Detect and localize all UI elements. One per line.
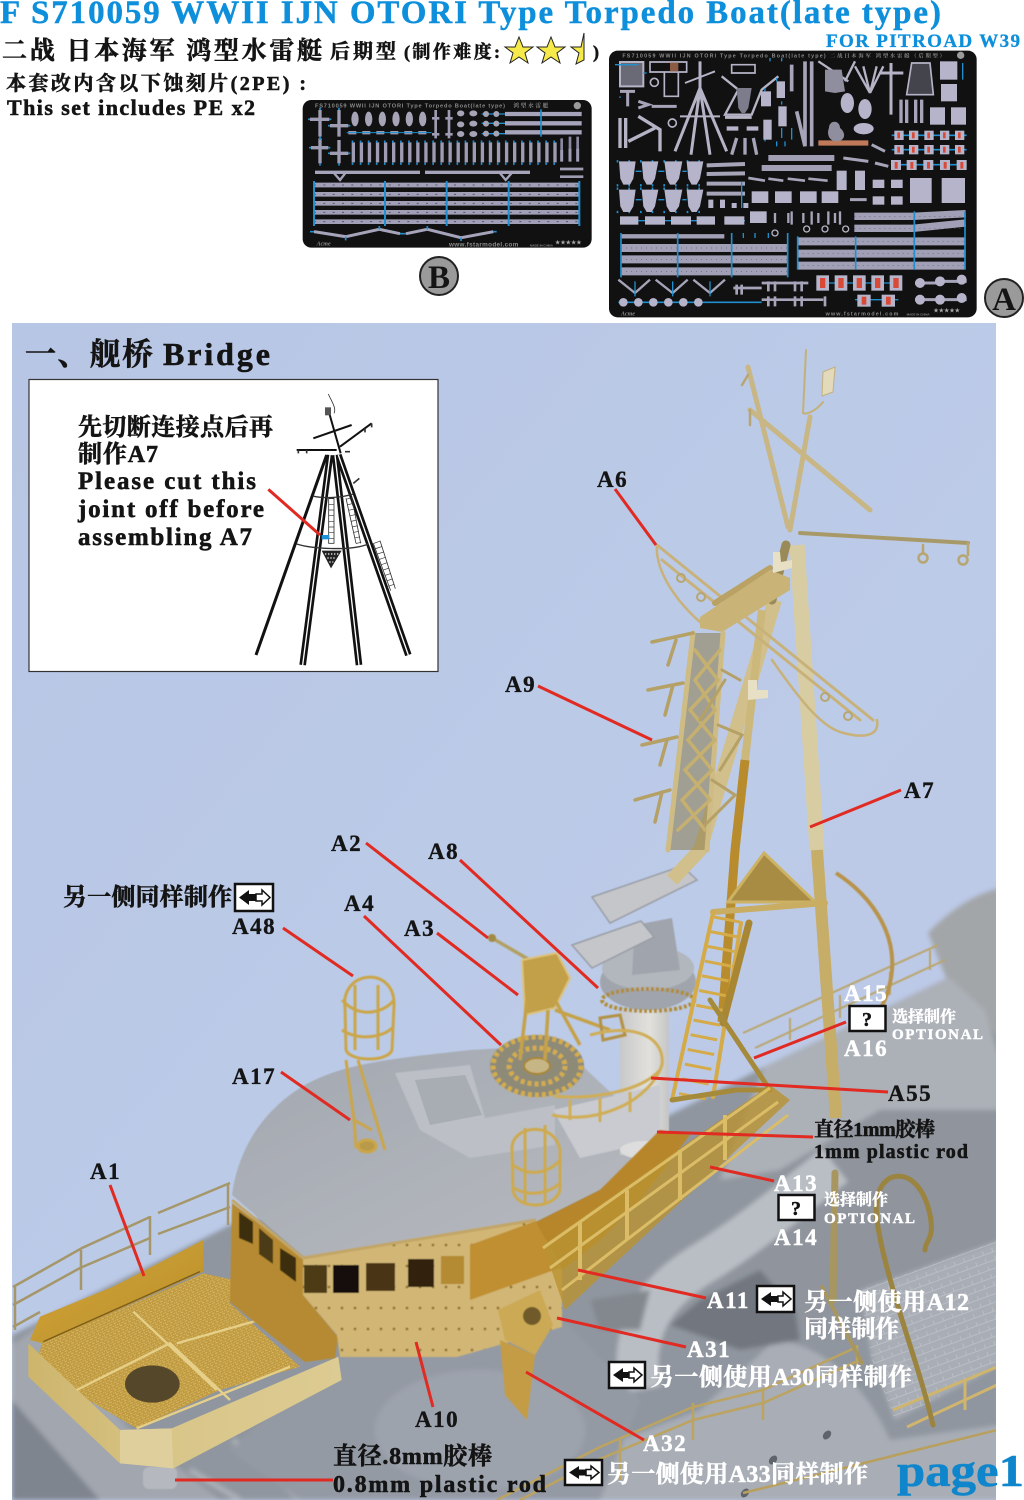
photo-etch sheet A: Acme	[620, 311, 635, 317]
dark part labels: A9	[505, 672, 536, 697]
optional callout A15/A16: A15	[844, 981, 888, 1006]
dark part labels: A6	[597, 467, 628, 492]
optional callout A15/A16: A16	[844, 1036, 888, 1061]
badge: sheet B	[420, 257, 458, 296]
forward platform A1	[28, 1240, 342, 1468]
label: A32 other side A33	[565, 1431, 868, 1488]
optional callout A13/A14: ?	[791, 1198, 801, 1220]
photo-etch sheet B: 鸿型水雷艇	[513, 102, 549, 110]
photo-etch sheet A: 二战日本海军 鸿型水雷艇（后期型）	[830, 52, 945, 60]
bridge gun director A2/A3 and platform A4	[488, 934, 625, 1097]
mast A7 with yards A6 and ladder A9	[635, 350, 968, 1118]
ship's column and director	[553, 866, 697, 1159]
optional callout A13/A14: A13	[774, 1171, 818, 1196]
label: A31 other side A30	[609, 1337, 912, 1391]
forward cage	[512, 1125, 560, 1205]
label: 1mm plastic rod: 直径1mm胶棒	[814, 1118, 935, 1141]
label: 0.8mm plastic rod	[333, 1443, 547, 1498]
inset panel: mast cut instruction: assembling A7	[78, 524, 252, 551]
platform rail A55	[552, 1031, 662, 1122]
badge: sheet A	[985, 279, 1023, 318]
badge: sheet A: A	[992, 282, 1016, 318]
dark part labels: A55	[888, 1081, 932, 1106]
dark part labels: A48	[232, 914, 276, 939]
photo-etch sheet A: www.fstarmodel.com	[825, 312, 899, 318]
label: 1mm plastic rod: 1mm plastic rod	[814, 1141, 968, 1163]
optional callout A13/A14: OPTIONAL	[824, 1211, 915, 1227]
photo-etch sheet B	[303, 100, 592, 249]
photo-etch sheet A: ★★★★★	[933, 308, 961, 314]
subtitle: Chinese name and difficulty: )	[593, 42, 599, 63]
optional callout A13/A14	[774, 1171, 915, 1250]
lower deck railings	[497, 1345, 997, 1500]
inset panel: mast cut instruction: joint off before	[77, 496, 264, 523]
dark part labels: A4	[344, 891, 375, 916]
section heading	[25, 336, 270, 372]
optional callout A15/A16: OPTIONAL	[892, 1027, 983, 1043]
far railing and arch behind mast	[743, 873, 945, 1048]
optional callout A13/A14: 选择制作	[824, 1190, 888, 1209]
set contents: 本套改内含以下蚀刻片(2PE) :	[6, 71, 306, 95]
bridge front plates and windows A10	[230, 1130, 690, 1420]
photo-etch sheet B: FS710059 WWII IJN OTORI Type Torpedo Boat(late type)	[315, 104, 505, 110]
label: 0.8mm plastic rod: 直径.8mm胶棒	[333, 1443, 492, 1470]
set contents	[6, 71, 306, 120]
photo-etch sheet B: MADE IN CHINA	[530, 244, 554, 248]
subtitle: Chinese name and difficulty: 后期型	[330, 40, 396, 63]
photo-etch sheet B: www.fstarmodel.com	[448, 242, 519, 249]
dark part labels: A7	[904, 778, 935, 803]
photo-etch sheet B: Acme	[316, 242, 331, 248]
label: A11 other side A12: 另一侧使用A12	[804, 1288, 969, 1316]
photo-etch sheet A	[609, 51, 977, 318]
optional callout A15/A16: 选择制作	[892, 1007, 956, 1026]
dark part labels: A10	[415, 1407, 459, 1432]
badge: sheet B: B	[428, 260, 450, 296]
inset panel: mast cut instruction: 制作A7	[78, 441, 158, 468]
bridge dome	[232, 1045, 660, 1258]
long bridge rail A11/A13	[543, 1085, 790, 1310]
subtitle: Chinese name and difficulty	[2, 37, 599, 65]
inset panel: mast cut instruction: 先切断连接点后再	[78, 413, 273, 441]
set contents: This set includes PE x2	[7, 95, 255, 120]
subtitle: Chinese name and difficulty: 二战 日本海军 鸿型水雷艇	[2, 37, 322, 65]
section heading: Bridge	[163, 336, 270, 372]
dark part labels: A2	[331, 831, 362, 856]
optional callout A15/A16: ?	[862, 1009, 872, 1031]
photo-etch sheet A: FS710059 WWII IJN OTORI Type Torpedo Boat(late type)	[622, 54, 826, 60]
dark part labels: A3	[404, 916, 435, 941]
label: A32 other side A33: 另一侧使用A33同样制作	[607, 1460, 868, 1488]
compatibility note: FOR PITROAD W39	[826, 31, 1020, 52]
hull and superstructure	[12, 888, 1000, 1500]
dark part labels: A1	[90, 1159, 121, 1184]
subtitle: Chinese name and difficulty: (制作难度:	[404, 41, 500, 63]
port railing	[13, 1183, 230, 1330]
section heading: 一、舰桥	[25, 337, 153, 372]
callout lines	[110, 489, 901, 1480]
photo-etch sheet B: ★★★★★	[555, 240, 582, 246]
inset panel: mast cut instruction: Please cut this	[78, 468, 256, 495]
label: A11 other side A12	[707, 1286, 969, 1343]
label: 1mm plastic rod	[814, 1118, 968, 1163]
difficulty stars	[505, 33, 584, 64]
cage A48 and A17 post	[342, 977, 394, 1152]
label: A31 other side A30: 另一侧使用A30同样制作	[650, 1363, 912, 1391]
dark part labels	[90, 467, 935, 1432]
label: A32 other side A33: A32	[643, 1431, 687, 1456]
label: A31 other side A30: A31	[687, 1337, 731, 1362]
label: 0.8mm plastic rod: 0.8mm plastic rod	[333, 1472, 547, 1498]
label: A11 other side A12: 同样制作	[804, 1316, 899, 1343]
gold arch and strut	[822, 1173, 933, 1425]
optional callout A13/A14: A14	[774, 1225, 818, 1250]
dark part labels: A8	[428, 839, 459, 864]
note: other side same: 另一侧同样制作	[63, 883, 232, 911]
photo panel: model ship bridge	[12, 323, 1000, 1500]
label: A11 other side A12: A11	[707, 1288, 750, 1313]
page number: page1	[897, 1446, 1024, 1496]
inset panel: mast cut instruction	[29, 380, 438, 672]
optional callout A15/A16	[844, 981, 983, 1061]
dark part labels: A17	[232, 1064, 276, 1089]
photo-etch sheet A: MADE IN CHINA	[907, 313, 930, 317]
